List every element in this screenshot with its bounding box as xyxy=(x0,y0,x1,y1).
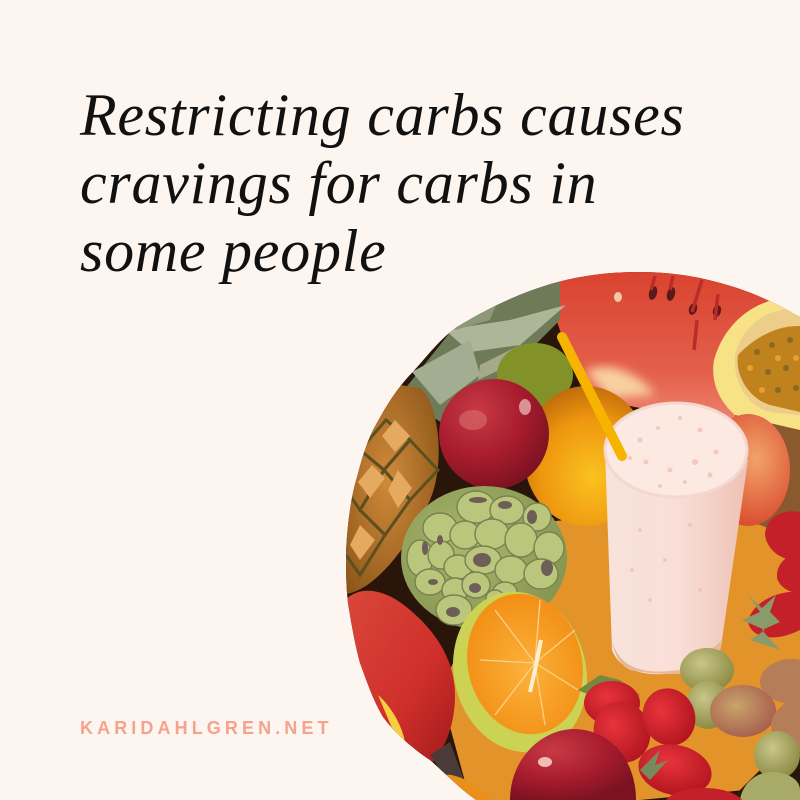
fruit photo in circular crop xyxy=(346,272,800,800)
strawberries bottom xyxy=(578,675,742,800)
dark corner xyxy=(739,770,762,791)
red mango xyxy=(345,591,455,765)
website credit: KARIDAHLGREN.NET xyxy=(80,718,333,738)
red apple bottom xyxy=(510,729,636,800)
lime xyxy=(497,343,573,407)
title: some people xyxy=(80,218,386,284)
title: cravings for carbs in xyxy=(80,150,597,216)
pineapple leaves xyxy=(407,282,566,422)
halved orange xyxy=(453,592,587,752)
title: Restricting carbs causes xyxy=(80,82,685,148)
grapes xyxy=(680,648,800,800)
wooden board xyxy=(440,500,800,800)
title xyxy=(80,82,685,284)
smoothie glass xyxy=(605,403,748,674)
back orange xyxy=(527,386,634,526)
passion fruit half xyxy=(713,297,800,436)
right apple xyxy=(732,414,800,528)
watermelon slice xyxy=(544,272,800,419)
yellow straw xyxy=(562,337,622,456)
dark background behind fruit xyxy=(346,272,800,800)
custard apple xyxy=(401,486,567,630)
red stone fruit xyxy=(439,379,549,489)
bottom left dark and small fruit xyxy=(430,742,492,800)
pineapple body xyxy=(346,385,439,594)
strawberries right xyxy=(742,511,800,650)
